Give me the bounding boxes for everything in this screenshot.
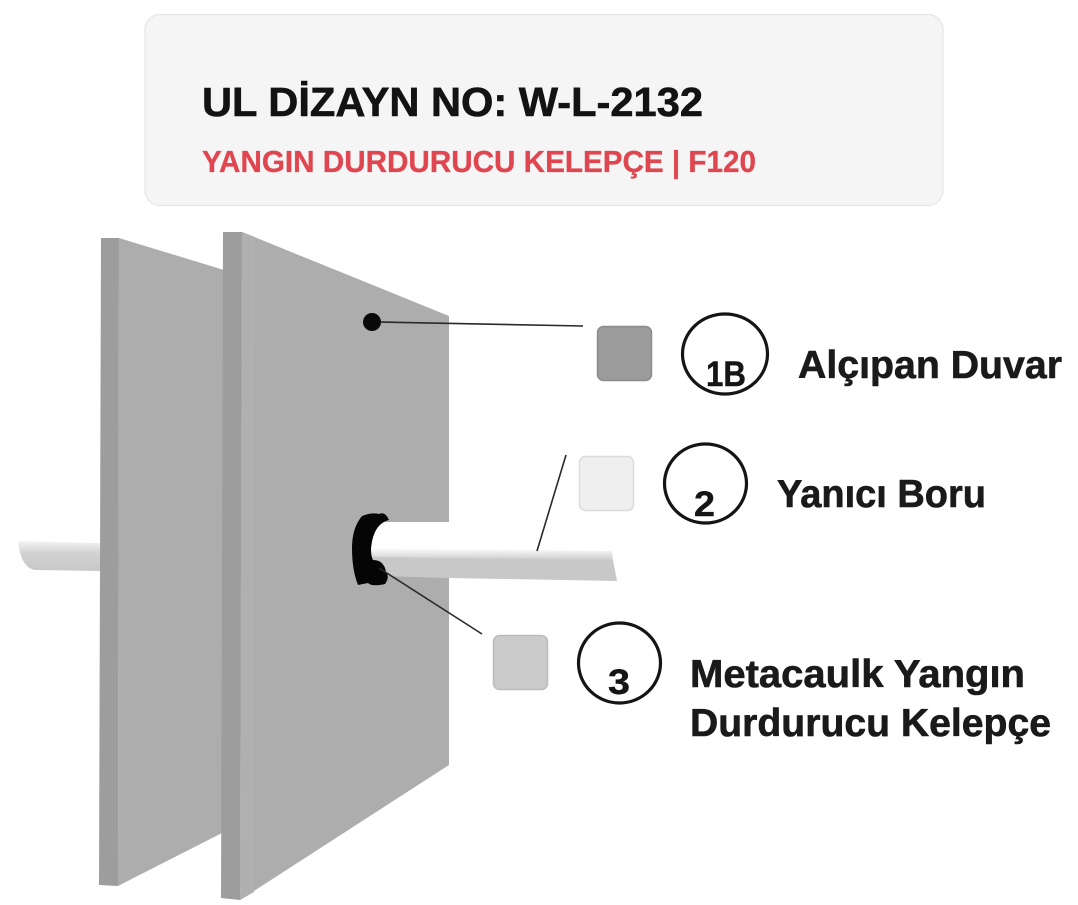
leader dot bbox=[363, 313, 381, 331]
back drywall panel bbox=[99, 238, 224, 886]
number badge: 2 bbox=[694, 485, 715, 524]
number badge bbox=[578, 623, 660, 703]
pipe through wall bbox=[371, 522, 617, 581]
fire stop collar bbox=[352, 513, 389, 585]
label: Yanıcı Boru bbox=[777, 473, 986, 516]
header card bbox=[145, 14, 943, 206]
left pipe segment bbox=[18, 541, 100, 571]
label: Durdurucu Kelepçe bbox=[690, 702, 1051, 745]
number badge bbox=[682, 314, 768, 394]
subtitle: YANGIN DURDURUCU KELEPÇE | F120 bbox=[202, 144, 756, 179]
label bbox=[690, 653, 1051, 745]
number badge: 1B bbox=[706, 355, 746, 394]
legend item: pipe bbox=[580, 444, 986, 524]
number badge: 3 bbox=[608, 663, 630, 702]
swatch bbox=[598, 326, 652, 380]
leader lines bbox=[379, 322, 583, 634]
label: Alçıpan Duvar bbox=[798, 344, 1062, 387]
title: UL DİZAYN NO: W-L-2132 bbox=[202, 79, 703, 125]
legend item: collar bbox=[494, 623, 1051, 745]
swatch bbox=[494, 636, 548, 690]
label: Metacaulk Yangın bbox=[690, 653, 1025, 696]
front drywall panel bbox=[221, 232, 449, 900]
swatch bbox=[580, 456, 634, 510]
number badge bbox=[664, 444, 746, 524]
legend item: drywall bbox=[598, 314, 1062, 394]
